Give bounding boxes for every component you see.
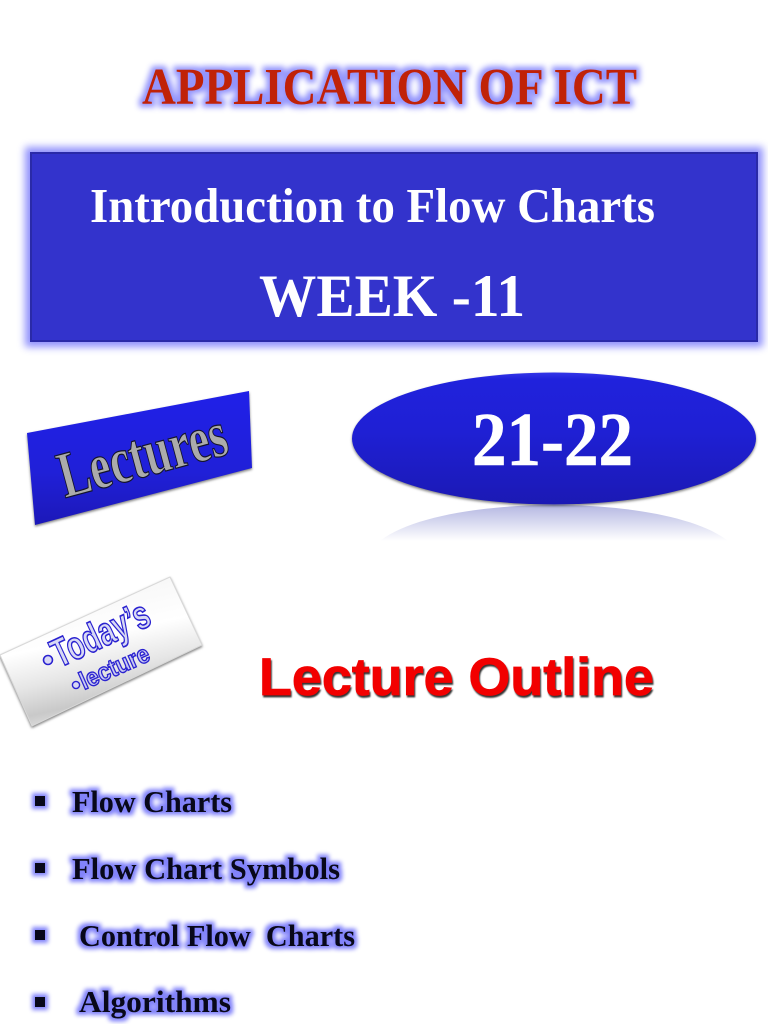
item: control flow charts: Control Flow Charts [79,918,355,953]
card bullet: today's [44,656,52,664]
card: today's lecture [0,577,202,726]
badge: lecture numbers [352,372,756,541]
card text: today's: Today’s [44,592,157,676]
card text: lecture: lecture [75,640,154,695]
item: flow charts: Flow Charts [72,784,232,819]
banner: lectures [27,391,252,525]
banner label: Lectures [50,397,235,512]
panel: week heading [31,153,757,341]
heading: lecture outline: Lecture Outline [259,648,654,707]
card shape [0,577,202,726]
badge reflection [380,505,728,541]
list: outline items [35,784,355,1019]
card bullet: lecture [72,681,80,689]
title: APPLICATION OF ICT [142,59,637,116]
item: algorithms: Algorithms [79,984,231,1019]
panel background [31,153,757,341]
heading: week number: WEEK -11 [259,263,525,329]
heading: introduction: Introduction to Flow Charts [90,178,655,233]
banner shape [27,391,252,525]
badge oval [352,372,756,504]
item: flow chart symbols: Flow Chart Symbols [72,851,340,886]
badge number: 21-22 [472,398,633,482]
